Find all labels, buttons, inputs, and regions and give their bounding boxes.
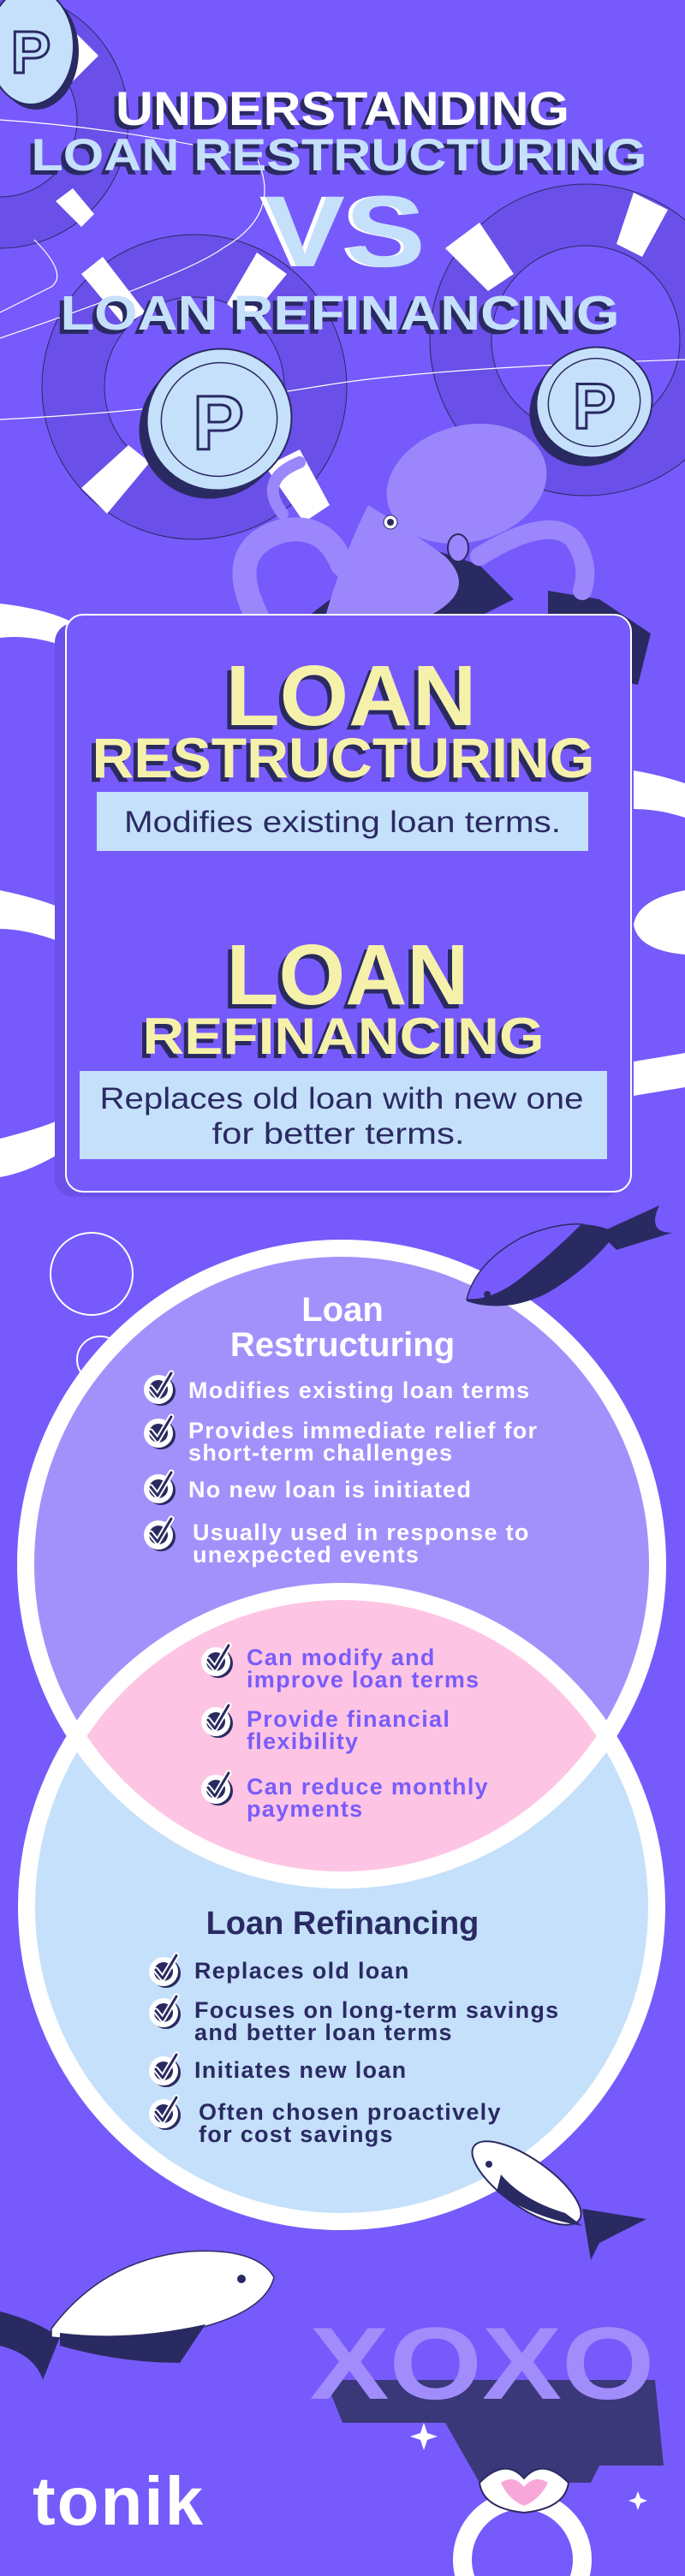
icon: coin top-left: P <box>11 19 51 86</box>
icon: coin right <box>514 331 668 482</box>
list: loan restructuring <box>144 1291 538 1568</box>
decoration: thin lines <box>0 120 685 419</box>
heading: loan refinancing: REFINANCING <box>142 1008 545 1065</box>
list: loan restructuring: No new loan is initiated <box>188 1477 472 1502</box>
list: loan restructuring: Provides immediate relief for <box>188 1418 538 1443</box>
background wave stripes <box>0 604 685 1177</box>
list: loan refinancing: Initiates new loan <box>194 2057 407 2083</box>
list: loan refinancing: Replaces old loan <box>194 1958 410 1984</box>
title: LOAN REFINANCING <box>60 286 620 341</box>
list: shared traits: Can reduce monthly <box>247 1774 489 1800</box>
list: loan refinancing: Focuses on long-term savings <box>194 1997 559 2023</box>
heading: loan restructuring: RESTRUCTURING <box>87 730 591 794</box>
list: loan refinancing: Loan Refinancing <box>206 1906 479 1942</box>
title: VS <box>259 176 423 289</box>
logo: tonik: tonik <box>33 2463 205 2539</box>
heading: loan refinancing: LOAN <box>226 927 469 1023</box>
decoration: xoxo <box>310 2306 664 2483</box>
text block: restructuring definition: Modifies existing loan terms. <box>124 806 561 839</box>
list: loan restructuring: Restructuring <box>230 1326 455 1364</box>
list: loan restructuring: Loan <box>301 1291 384 1329</box>
illustration: fish right <box>461 2127 646 2260</box>
list: loan refinancing: and better loan terms <box>194 2020 453 2045</box>
text block: restructuring definition <box>97 792 588 851</box>
heading: loan restructuring: LOAN <box>226 648 476 744</box>
list: shared traits: flexibility <box>247 1728 359 1754</box>
icon: coin top-left <box>0 0 79 110</box>
text block: refinancing definition <box>80 1071 607 1159</box>
heading: loan restructuring: RESTRUCTURING <box>92 726 594 789</box>
illustration: fish left <box>0 2251 274 2380</box>
decoration: lifebuoy rings <box>0 0 685 539</box>
title: LOAN RESTRUCTURING <box>27 134 642 185</box>
title: LOAN RESTRUCTURING <box>31 130 646 181</box>
title: UNDERSTANDING <box>111 86 565 140</box>
heading: loan refinancing <box>139 927 545 1069</box>
list: loan restructuring: short-term challenges <box>188 1440 453 1466</box>
list: loan restructuring: Modifies existing loan terms <box>188 1377 530 1403</box>
list: shared traits <box>201 1645 489 1822</box>
list: loan refinancing <box>149 1906 559 2147</box>
heading: loan refinancing: LOAN <box>223 931 464 1027</box>
list: shared traits: payments <box>247 1796 363 1822</box>
title: LOAN REFINANCING <box>57 290 615 345</box>
text block: refinancing definition: for better terms. <box>212 1117 464 1151</box>
illustration: fish top <box>467 1205 672 1306</box>
icon: coin center <box>116 325 315 522</box>
icon: coin right: P <box>573 370 616 442</box>
illustration: octopus <box>244 407 651 685</box>
list: loan refinancing: Often chosen proactively <box>199 2099 502 2125</box>
panel: definitions <box>55 615 631 1197</box>
list: shared traits: Provide financial <box>247 1706 450 1732</box>
title: UNDERSTANDING <box>116 81 569 135</box>
chart: venn diagram <box>26 1248 658 2222</box>
decoration: xoxo: XOXO <box>310 2306 654 2421</box>
icon: coin center: P <box>193 381 244 467</box>
title <box>27 81 646 345</box>
icon: sparkles <box>410 2423 647 2510</box>
icon: heart hands ring <box>462 2469 582 2576</box>
title: VS <box>265 176 426 289</box>
list: loan refinancing: for cost savings <box>199 2121 394 2147</box>
list: loan restructuring: Usually used in response to <box>193 1520 530 1545</box>
list: loan restructuring: unexpected events <box>193 1542 420 1568</box>
list: shared traits: Can modify and <box>247 1645 436 1670</box>
heading: loan restructuring: LOAN <box>221 652 473 748</box>
text block: refinancing definition: Replaces old loan with new one <box>99 1082 584 1115</box>
heading: loan refinancing: REFINANCING <box>139 1012 539 1069</box>
heading: loan restructuring <box>87 648 594 794</box>
list: shared traits: improve loan terms <box>247 1667 480 1693</box>
icon: bubbles <box>51 1233 457 2204</box>
